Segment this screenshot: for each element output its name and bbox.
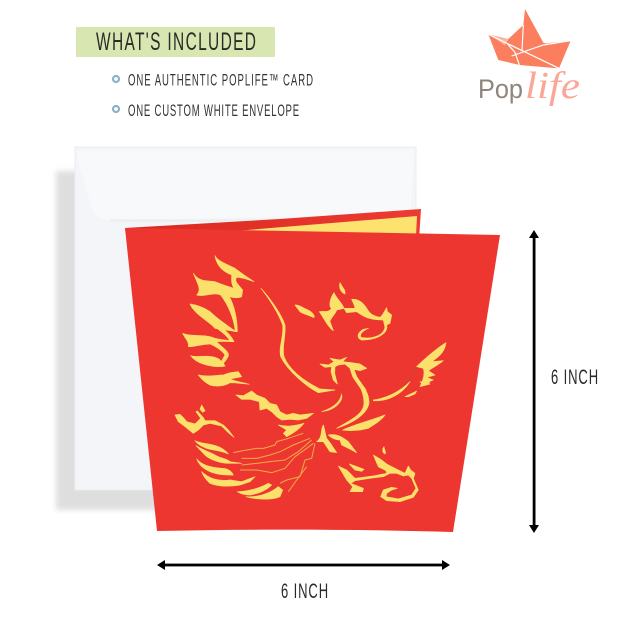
arrow: height dimension — [529, 230, 539, 533]
envelope shadow — [56, 171, 356, 510]
label: width 6 inch: 6 INCH — [281, 579, 328, 603]
list: included items: ONE AUTHENTIC POPLIFE™ CARD — [128, 71, 313, 89]
logo: poplife: life — [525, 65, 580, 107]
card back panel — [125, 209, 421, 240]
phoenix upper half — [183, 256, 446, 393]
heading: what's included: WHAT'S INCLUDED — [96, 28, 256, 56]
list: included items — [113, 71, 313, 120]
envelope — [56, 147, 416, 510]
logo: poplife — [478, 9, 580, 107]
phoenix lower half — [175, 380, 430, 502]
label: height 6 inch: 6 INCH — [551, 365, 598, 389]
illustration: phoenix — [175, 256, 446, 502]
envelope body — [75, 147, 416, 490]
icon: origami boat — [488, 9, 571, 68]
card — [125, 209, 500, 532]
card yellow insert — [235, 216, 417, 236]
card front — [125, 228, 500, 532]
envelope flap — [77, 150, 414, 220]
list: included items: ONE CUSTOM WHITE ENVELOPE — [128, 101, 299, 120]
arrow: width dimension — [157, 560, 450, 570]
logo wordmark: Pop — [478, 74, 523, 104]
